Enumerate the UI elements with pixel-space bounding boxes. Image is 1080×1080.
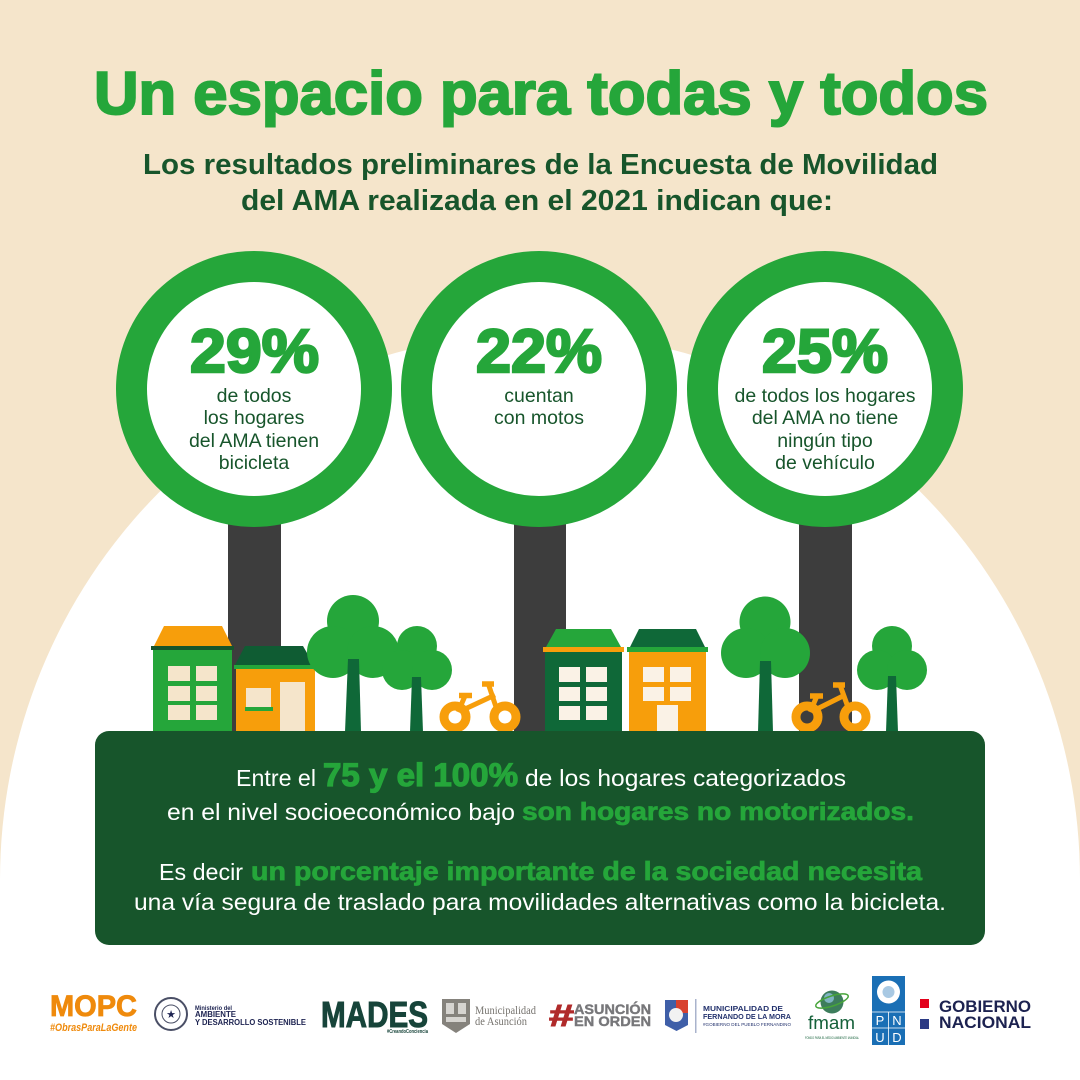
logo: Gobierno Nacional: GOBIERNO <box>939 997 1031 1016</box>
stat circle: 22% motorcycles: con motos <box>494 407 584 429</box>
icon: orange house with dark roof <box>234 646 316 732</box>
logo: Municipalidad de Asunción: Municipalidad <box>475 1003 536 1017</box>
logo: FMAM <box>805 990 859 1040</box>
title: Un espacio para todas y todos <box>94 60 988 127</box>
line 4: una vía segura de traslado para movilidades alternativas como la bicicleta. <box>134 889 946 915</box>
stat circle: 25% no vehicle: del AMA no tiene <box>752 407 898 429</box>
line 3: un porcentaje importante de la sociedad necesita <box>251 856 923 886</box>
logo: #Asunción en orden: EN ORDEN <box>574 1013 651 1029</box>
logo: #Asunción en orden: ASUNCIÓN <box>574 1000 651 1017</box>
line 2: en el nivel socioeconómico bajo <box>167 799 515 825</box>
sign pole: right <box>799 500 852 735</box>
subtitle <box>143 149 938 217</box>
line 1 <box>236 757 846 793</box>
panel: socioeconomic message <box>95 731 985 945</box>
logo: Municipalidad de Fernando de la Mora: #GOBIERNO DEL PUEBLO FERNANDINO <box>703 1022 791 1027</box>
stat circle: 25% no vehicle: de todos los hogares <box>734 385 916 407</box>
stat circle: 25% no vehicle: 25% <box>762 317 888 385</box>
stat circle: 29% bicycles <box>132 266 376 512</box>
logo: Ministerio del Ambiente <box>155 998 307 1030</box>
icon: small tree right <box>857 626 927 732</box>
stat circle: 29% bicycles: del AMA tienen <box>189 430 319 452</box>
logo: FMAM: fmam <box>808 1013 855 1033</box>
icon: orange house centre <box>627 629 708 732</box>
logo: PNUD: U <box>875 1030 885 1045</box>
icon: large tree left <box>307 595 399 732</box>
sign pole: centre <box>514 500 566 735</box>
line 2 <box>167 798 914 826</box>
stat circle: 22% motorcycles <box>416 266 662 512</box>
line 1: 75 y el 100% <box>323 757 518 793</box>
stat circle: 29% bicycles: los hogares <box>204 407 305 429</box>
icon: bicycle left <box>444 683 516 728</box>
logo: MADES: MADES <box>321 994 428 1035</box>
logo: PNUD: N <box>892 1013 902 1028</box>
logo: PNUD: P <box>876 1013 884 1028</box>
icon: small tree left <box>382 626 452 732</box>
logo: FMAM: FONDO PARA EL MEDIO AMBIENTE MUNDIAL <box>805 1036 859 1040</box>
stat circle: 25% no vehicle: ningún tipo <box>777 430 873 452</box>
logo: MOPC: #ObrasParaLaGente <box>50 1022 137 1034</box>
icon: bicycle right <box>796 685 866 728</box>
logo: Gobierno Nacional <box>920 997 1031 1032</box>
logo: PNUD: D <box>892 1030 902 1045</box>
stat circle: 22% motorcycles: 22% <box>476 317 602 385</box>
stat circle: 29% bicycles: de todos <box>217 385 292 407</box>
logo: MADES: #CreandoConciencia <box>387 1029 428 1035</box>
logo: Municipalidad de Asunción: de Asunción <box>475 1014 527 1028</box>
logo: Gobierno Nacional: NACIONAL <box>939 1013 1031 1032</box>
logo: Ministerio del Ambiente: Y DESARROLLO SOSTENIBLE <box>195 1018 307 1027</box>
line 1: de los hogares categorizados <box>525 765 846 791</box>
logo: MOPC: MOPC <box>50 990 137 1023</box>
logo: Ministerio del Ambiente: Ministerio del <box>195 1006 232 1012</box>
stat circle: 25% no vehicle <box>702 266 948 512</box>
logo: Ministerio del Ambiente: ★ <box>166 1009 176 1021</box>
stat circle: 22% motorcycles: cuentan <box>504 385 574 407</box>
sign pole: left <box>228 500 281 735</box>
stat circle: 29% bicycles: 29% <box>190 317 319 385</box>
logo: Municipalidad de Asunción <box>442 999 536 1033</box>
logo: Ministerio del Ambiente: AMBIENTE <box>195 1010 237 1019</box>
logo: PNUD <box>872 976 905 1045</box>
stat circle: 29% bicycles: bicicleta <box>219 452 289 474</box>
logo: Municipalidad de Fernando de la Mora <box>665 999 791 1033</box>
logo: #Asunción en orden <box>549 998 651 1033</box>
subtitle: Los resultados preliminares de la Encuesta de Movilidad <box>143 149 938 181</box>
logo: Municipalidad de Fernando de la Mora: MUNICIPALIDAD DE <box>703 1006 783 1013</box>
logo: #Asunción en orden: # <box>549 998 574 1033</box>
line 1: Entre el <box>236 765 316 791</box>
line 2: son hogares no motorizados. <box>522 798 914 826</box>
logo: Municipalidad de Fernando de la Mora: FERNANDO DE LA MORA <box>703 1014 791 1021</box>
icon: green house with orange roof <box>151 626 234 732</box>
icon: large tree right <box>721 596 810 732</box>
subtitle: del AMA realizada en el 2021 indican que: <box>241 185 833 217</box>
stat circle: 25% no vehicle: de vehículo <box>775 452 875 474</box>
icon: dark house centre <box>543 629 624 732</box>
line 3: Es decir <box>159 859 243 885</box>
